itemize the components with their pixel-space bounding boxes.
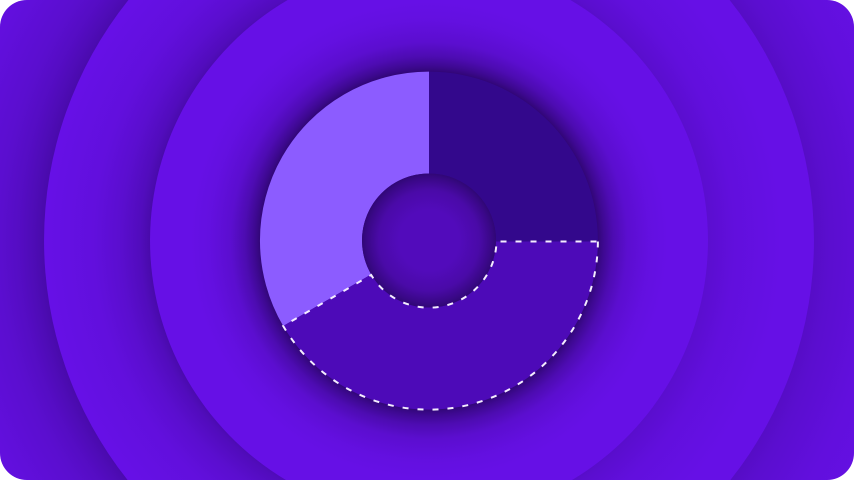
middle ring — [150, 0, 708, 480]
donut glow shadow — [212, 23, 646, 458]
segment: highlighted mid purple — [283, 242, 598, 410]
donut chart — [260, 72, 598, 410]
segment: light purple — [260, 72, 429, 326]
centre hole — [362, 174, 496, 308]
segment: dark quarter — [429, 72, 598, 241]
dashed outline — [283, 242, 598, 410]
outer ring inner shadow band — [88, 0, 740, 480]
